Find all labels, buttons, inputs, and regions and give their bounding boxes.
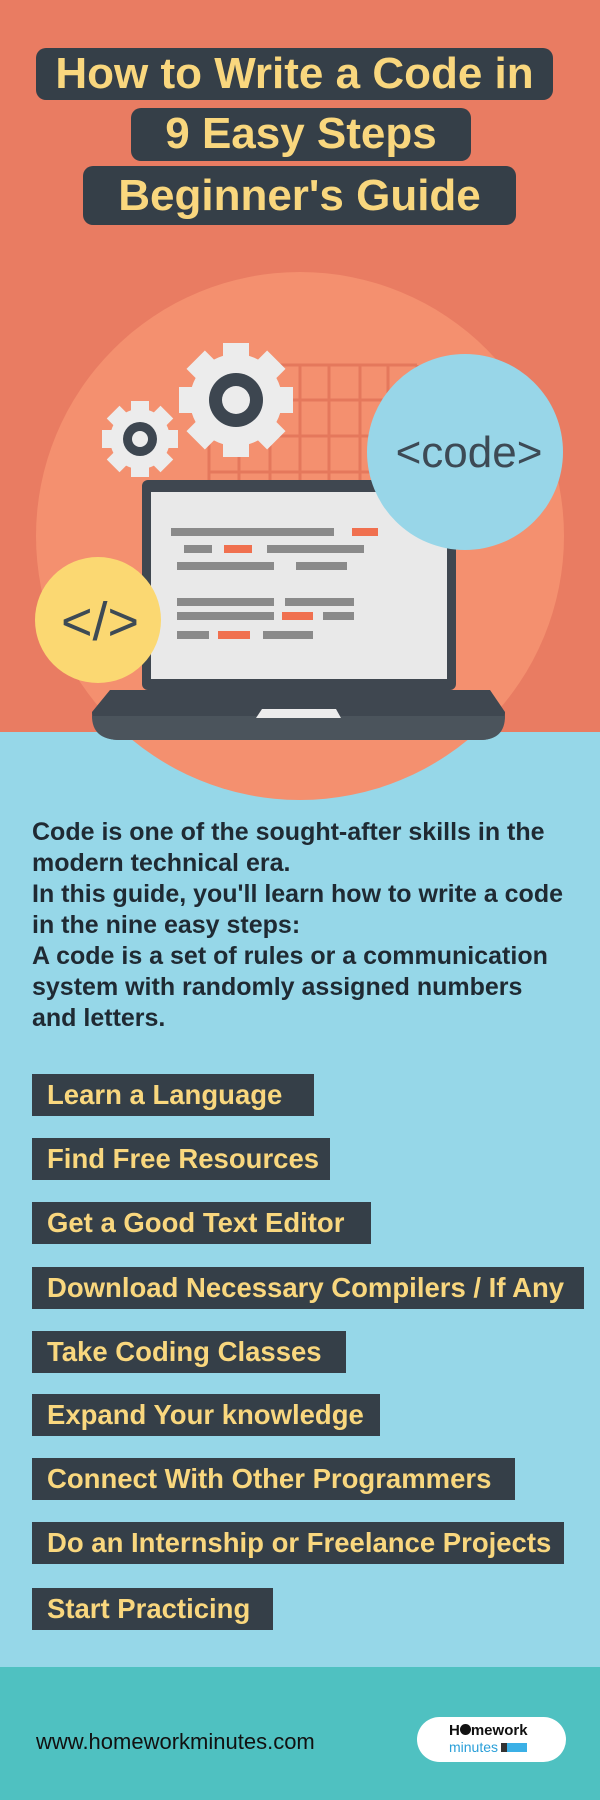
top background xyxy=(0,0,600,732)
steps list: Learn a Language xyxy=(47,1079,282,1110)
steps list xyxy=(32,1074,584,1630)
steps list: Download Necessary Compilers / If Any xyxy=(47,1272,564,1303)
title xyxy=(36,48,553,225)
icon: code bubble xyxy=(367,354,563,550)
steps list: Find Free Resources xyxy=(47,1143,319,1174)
code lines xyxy=(171,528,364,639)
icon: small gear xyxy=(102,401,178,477)
intro text: In this guide, you'll learn how to write a code xyxy=(32,880,563,908)
illustration xyxy=(35,272,564,800)
intro text xyxy=(32,818,563,1032)
steps list: Do an Internship or Freelance Projects xyxy=(47,1527,551,1558)
steps list: Start Practicing xyxy=(47,1593,250,1624)
intro text: Code is one of the sought-after skills in the xyxy=(32,818,545,846)
intro text: in the nine easy steps: xyxy=(32,911,300,939)
icon: code bubble: <code> xyxy=(396,428,542,477)
footer background xyxy=(0,1667,600,1800)
steps list: Get a Good Text Editor xyxy=(47,1207,344,1238)
grid xyxy=(209,365,417,480)
title: How to Write a Code in xyxy=(55,49,534,98)
laptop xyxy=(92,480,505,740)
logo: minutes xyxy=(449,1739,498,1755)
icon: big gear xyxy=(179,343,293,457)
icon: closing tag bubble xyxy=(35,557,161,683)
steps list: Expand Your knowledge xyxy=(47,1399,364,1430)
steps list: Connect With Other Programmers xyxy=(47,1463,491,1494)
logo xyxy=(417,1717,566,1762)
title: 9 Easy Steps xyxy=(165,109,437,158)
title: Beginner's Guide xyxy=(118,171,481,220)
steps list: Take Coding Classes xyxy=(47,1336,322,1367)
icon: closing tag bubble: </> xyxy=(61,592,139,652)
intro text: and letters. xyxy=(32,1004,165,1032)
background circle xyxy=(36,272,564,800)
intro text: A code is a set of rules or a communication xyxy=(32,942,548,970)
intro text: modern technical era. xyxy=(32,849,290,877)
intro text: system with randomly assigned numbers xyxy=(32,973,522,1001)
footer url: www.homeworkminutes.com xyxy=(36,1729,315,1754)
logo: H mework xyxy=(449,1722,528,1739)
